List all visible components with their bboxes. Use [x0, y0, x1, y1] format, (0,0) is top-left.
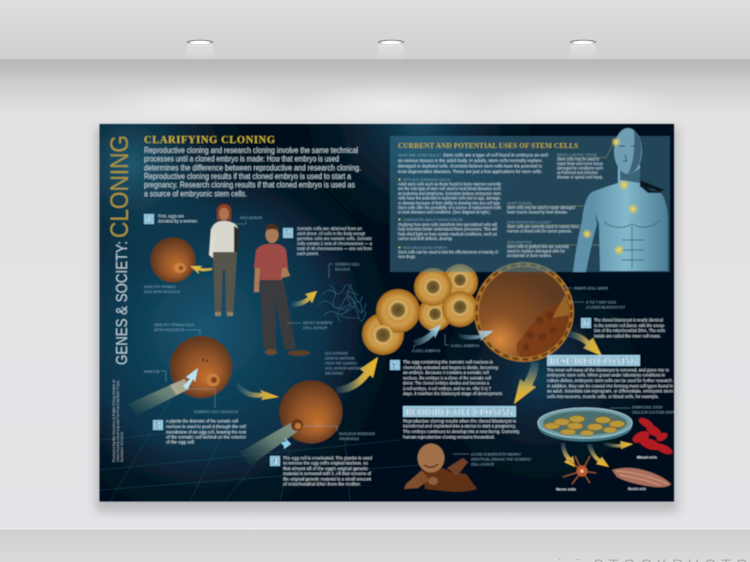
labels: blastocyst: 4 TO 7 DAY OLD [586, 300, 616, 304]
labels: embryo stages: 2-CELL EMBRYO [411, 349, 440, 353]
somatic nucleus chromosomes tangle [318, 284, 366, 322]
use: heart disease: heart muscle caused by heart disease. [507, 210, 568, 214]
arrow: step 3 to step 4 [236, 382, 279, 400]
step 2: Somatic cells are obtained from an [297, 226, 363, 231]
use: brain and nerve tissue: as Parkinson and Alzheimer [557, 170, 599, 175]
step 5: chemically activated and begins to divide, becoming [403, 365, 498, 370]
credit line [112, 380, 124, 462]
egg with pipette, step 3: HEALTHY FEMALE EGG [154, 323, 194, 327]
step 2: total of 46 chromosomes — one set from [297, 246, 373, 251]
label: adult somatic cell donor [287, 321, 333, 330]
use: heart disease: Stem cells may be used to repair damaged [507, 205, 576, 210]
2-cell embryo [362, 289, 420, 355]
step 6: 6 [584, 318, 588, 330]
step 3: nucleus is used to push it through the cell [166, 424, 246, 429]
use: learn more about human disease: cancer and birth defects, develop. [398, 236, 453, 241]
text: research cloning: embryonic stem cells. When grown under laboratory conditions in [547, 373, 665, 378]
poster: Genes and Society, Cloning [100, 124, 674, 502]
arrow: step 4 to embryo [335, 357, 378, 393]
step 5: The egg containing the somatic cell nucleus is [403, 360, 494, 364]
step 5: nucleus, the embryo is a clone of the somatic cell [403, 376, 491, 380]
use: brain and nerve tissue: disease or spinal cord injury. [557, 174, 603, 180]
blastocyst [474, 262, 574, 362]
label: egg containing genetic material: EGG CONTAINING [325, 352, 348, 356]
labels: embryo stages: 4-CELL EMBRYO [451, 344, 479, 348]
step 4: of mitochondrial DNA from the mother. [283, 482, 361, 487]
use: brain and nerve tissue: BRAIN & NERVE TISSUE [557, 152, 597, 157]
use: new drug development: new drugs. [398, 254, 416, 259]
step 5 [390, 360, 503, 396]
use: learn more about human disease: help shed light on how certain medical conditions, such as [398, 231, 497, 236]
step 2: adult donor. All cells in the body except [297, 231, 366, 236]
figure: egg donor woman [209, 204, 239, 316]
step 4: that almost all of the egg's original genetic [283, 466, 369, 471]
label: somatic cell nucleus callout: SOMATIC CELL NUCLEUS [194, 410, 239, 414]
text: reproductive cloning: human reproductive cloning remains theoretical. [403, 434, 495, 439]
step 1: 1 [146, 214, 152, 226]
heading: Research Cloning: RESEARCH CLONING [550, 356, 637, 367]
stem cell site markers [582, 137, 638, 256]
stem cell intro text [398, 152, 548, 174]
vertical title [106, 135, 134, 365]
step 5: donor. The cloned embryo divides and becomes a [403, 381, 489, 386]
heading: Clarifying Cloning: CLARIFYING CLONING [144, 135, 275, 146]
arrow: to reproductive cloning [514, 362, 539, 404]
arrow: to somatic nucleus [291, 291, 317, 307]
label: egg donor [232, 216, 262, 224]
vertical title: CLONING [106, 135, 134, 238]
use: bone marrow replacement: Stem cells are currently used to restore bone [507, 224, 580, 229]
label: clone is born: IDENTICAL DNA AS THE SOMATIC [471, 458, 531, 462]
use: heart disease [507, 200, 630, 214]
step 4: material is removed with it. All that remains of [283, 471, 372, 476]
culture dish with embryonic stem cells [538, 408, 632, 442]
use: replace damaged cells: REPLACE DAMAGED CELLS [403, 177, 450, 182]
label: adult somatic cell donor: ADULT SOMATIC [302, 321, 333, 325]
step 5: an embryo. Because it contains a somatic cell [403, 370, 489, 375]
use: skin grafting: SKIN GRAFTING [507, 240, 532, 244]
label: nucleus removed from egg: FROM EGG [339, 437, 359, 441]
step 1: First, eggs are [158, 214, 185, 218]
text: research cloning: cells into neurons, muscle cells, or blood cells, for example. [547, 394, 659, 399]
credit line: Produced by the Genetics & Public Policy Center at [112, 380, 116, 462]
use: learn more about human disease [398, 217, 497, 241]
vertical title: GENES & SOCIETY: [114, 241, 131, 365]
label: egg containing genetic material: AND DIVIDES [324, 372, 343, 376]
labels: blastocyst: INNER CELL MASS [574, 286, 609, 290]
stem cell intro text: WHAT ARE STEM CELLS? [398, 152, 442, 158]
text: research cloning [547, 368, 673, 399]
intro text block: processes until a cloned embryo is made: How that embryo is used [144, 155, 339, 164]
credit line: Illustration: Christina [120, 432, 124, 462]
arrow: to research cloning [566, 331, 602, 356]
text: research cloning: The inner cell mass of the blastocyst is removed, and gives rise to [547, 368, 669, 372]
step 2: 2 [286, 228, 290, 240]
poster background [100, 124, 674, 502]
label: clone is born: CELL DONOR [471, 462, 494, 466]
stem cell intro text: Stem cells are a type of cell found in embryos as well [443, 152, 548, 158]
egg with pipette, step 3: WITH NUCLEUS [154, 328, 185, 332]
step 6: The cloned blastocyst is nearly identical [594, 318, 663, 322]
use: bone marrow replacement: marrow or blood cells for cancer patients. [507, 228, 572, 234]
embryo arrows [413, 325, 493, 346]
use: brain and nerve tissue: Stem cells may be used to [557, 156, 600, 162]
use: new drug development: NEW DRUG DEVELOPMENT [403, 245, 447, 250]
muscle cells [612, 468, 671, 487]
label: somatic cell nucleus: SOMATIC CELL [335, 262, 360, 266]
arrow: donor to egg [190, 266, 212, 274]
step 5: 2-cell embryo, 4-cell embryo, and so on. After 5 to 7 [403, 386, 491, 391]
intro text block: a source of embryonic stem cells. [144, 189, 247, 198]
use: skin grafting: Stem cells in grafted skin are currently [507, 244, 570, 249]
use: brain and nerve tissue: repair brain and nerve tissue [557, 161, 604, 166]
figure: somatic cell donor man [254, 224, 310, 356]
text: research cloning: culture dishes, embryonic stem cells can be used for further research. [547, 378, 673, 383]
intro text block: pregnancy. Research cloning results if that cloned embryo is used as [144, 181, 355, 190]
step 3: of the somatic cell behind on the exterior [166, 434, 246, 440]
use: learn more about human disease: LEARN MORE ABOUT HUMAN DISEASE [403, 217, 463, 222]
label: egg containing genetic material: CELL DONOR GREEDS [325, 366, 362, 370]
label: healthy female egg with nucleus: HEALTHY FEMALE [144, 285, 177, 289]
ceiling lights [185, 40, 598, 62]
step 3: 3 [156, 420, 160, 432]
nerve cell [563, 456, 596, 484]
label: clone is born: CLONE IS BORN WITH NEARLY [471, 452, 521, 456]
baby clone [404, 444, 477, 492]
labels: blastocyst: CLONED BLASTOCYST [586, 306, 626, 310]
label: pipette: PIPETTE [144, 370, 161, 374]
text: reproductive cloning [403, 418, 520, 439]
step 2 [283, 226, 373, 256]
step 4: 4 [272, 456, 278, 468]
use: replace damaged cells: or disease because of their ability to develop into any cell type. [398, 200, 501, 205]
use: replace damaged cells [398, 177, 502, 215]
label: pipette [144, 370, 166, 382]
text: research cloning: In addition, they can be coaxed into forming most cell types found in [547, 383, 673, 388]
labels: blastocyst [562, 286, 626, 310]
use: replace damaged cells: are the sole type of stem cell used to treat blood diseases such [398, 186, 502, 191]
step 2: cells contain 2 sets of chromosomes — a [297, 241, 373, 246]
step 1 [144, 214, 198, 226]
step 6: inside are called the inner cell mass. [594, 334, 661, 338]
figure: blue human torso with stem cell sites [573, 128, 668, 272]
label: healthy female egg with nucleus [144, 285, 181, 294]
use: skin grafting: used to replace damaged skin for [507, 248, 566, 254]
label: nucleus removed from egg [303, 426, 375, 441]
use: replace damaged cells: Stem cells offer the possibility of a source of replacement cells [398, 205, 501, 210]
use: learn more about human disease: Studying how stem cells transform into specialized cells will [398, 222, 497, 227]
intro text block: Reproductive cloning results if that cloned embryo is used to start a [144, 172, 352, 181]
label: nerve cells: Nerve cells [556, 486, 576, 492]
step 5: 5 [392, 360, 398, 372]
step 3: of the egg cell. [166, 440, 195, 445]
text: research cloning: an adult. Scientists can reprogram, or differentiate, embryonic stem [547, 388, 673, 394]
use: new drug development [398, 245, 499, 259]
label: somatic cell nucleus [329, 262, 360, 278]
stem cell intro text: as various tissues in the adult body. In adults, stem cells normally replace [398, 158, 543, 163]
intro text block: determines the difference between reproductive and research cloning. [144, 163, 361, 172]
label: healthy female egg with nucleus: EGG WITH NUCLEUS [144, 290, 181, 294]
label: egg containing genetic material: FROM THE SOMATIC [325, 362, 357, 366]
use: replace damaged cells: to treat diseases and conditions. (See diagram at right.) [398, 210, 491, 215]
stem cell intro text: damaged or depleted cells. Scientists believe stem cells have the potential to [398, 164, 543, 168]
step 2: each parent. [297, 251, 319, 256]
label: clone is born [453, 452, 531, 466]
label: somatic cell nucleus: NUCLEUS [335, 268, 350, 272]
step 4: The egg cell is enucleated. The pipette is used [283, 456, 372, 460]
step 4: to remove the egg cell's original nucleus, so [283, 461, 368, 466]
use: bone marrow replacement [507, 220, 585, 234]
step 6 [581, 318, 666, 338]
label: egg containing genetic material: GENETIC MATERIAL [325, 356, 355, 360]
use: skin grafting [507, 240, 618, 258]
intro text block: Reproductive cloning and research cloning involve the same technical [144, 146, 358, 155]
step 3 [153, 418, 247, 445]
egg from donor [150, 238, 196, 282]
poster shadow [96, 128, 678, 512]
step 3: A pipette the diameter of the somatic cell [166, 418, 238, 424]
label: nucleus removed from egg: NUCLEUS REMOVED [339, 432, 375, 436]
label: embryonic stem cells in culture dish [610, 406, 674, 414]
label: embryonic stem cells in culture dish: CELLS IN CULTURE DISH [632, 410, 674, 414]
step 5: days, it reaches the blastocyst stage of development. [403, 391, 503, 396]
credit line: Johns Hopkins University and The Pew Charitable Trusts. [116, 380, 120, 462]
label: adult somatic cell donor: CELL DONOR [303, 326, 327, 330]
step 4 [270, 456, 372, 487]
use: brain and nerve tissue [557, 143, 614, 180]
heading: Reproductive Cloning: REPRODUCTIVE CLONING [406, 407, 513, 418]
label: somatic cell nucleus callout [180, 389, 239, 414]
stem cell intro text: treat degenerative diseases. These are just a few applications for stem cells: [398, 169, 542, 174]
egg with pipette, step 4 [240, 380, 342, 466]
step 1: donated by a woman. [158, 218, 198, 224]
use: bone marrow replacement: BONE MARROW REPLACEMENT [507, 220, 551, 224]
label: muscle cells: Muscle cells [628, 486, 646, 491]
text: reproductive cloning: The embryo continues to develop into a new being. Currently, [403, 429, 520, 434]
use: replace damaged cells: Adult stem cells such as those found in bone marrow currently [398, 182, 502, 186]
step 6: to the somatic cell donor, with the excep- [594, 323, 665, 328]
label: embryonic stem cells in culture dish: EMBRYONIC STEM [632, 406, 663, 410]
use: heart disease: HEART DISEASE [507, 200, 532, 206]
label: egg containing genetic material [324, 352, 362, 376]
label: egg donor: EGG DONOR [240, 216, 262, 220]
panel: current and potential uses of stem cells [390, 136, 670, 272]
use: replace damaged cells: cells have the potential to replenish cells lost to age, damage, [398, 196, 501, 201]
step 3: membrane of an egg cell, leaving the rest [166, 429, 247, 434]
use: skin grafting: accidental or burn victims. [507, 253, 552, 258]
use: learn more about human disease: help scientists better understand these processes. This will [398, 227, 497, 232]
4-cell embryo [414, 264, 478, 331]
egg with pipette, step 3 [128, 323, 232, 416]
use: replace damaged cells: as leukemia and lymphoma. Scientists believe embryonic stem [398, 191, 502, 196]
use: new drug development: Stem cells can be used to test the effectiveness or toxicity of [398, 250, 499, 254]
text: reproductive cloning: Reproductive cloning results when the cloned blastocyst is [403, 418, 517, 424]
labels: embryo stages [411, 334, 479, 353]
text: reproductive cloning: transferred and implanted into a uterus to start a pregnancy. [403, 424, 516, 429]
step 4: the original genetic material is a small amount [283, 476, 372, 481]
panel heading: CURRENT AND POTENTIAL USES OF STEM CELLS [398, 142, 578, 150]
blood cells [631, 416, 674, 456]
label: blood cells: Blood cells [637, 454, 657, 460]
use: brain and nerve tissue: damaged by conditions such [557, 166, 604, 170]
step 6: tion of the mitochondrial DNA. The cells [594, 328, 666, 333]
arrows: dish to differentiated cells [561, 441, 633, 467]
intro text block [144, 146, 361, 198]
step 2: germline cells are somatic cells. Somatic [297, 236, 372, 241]
